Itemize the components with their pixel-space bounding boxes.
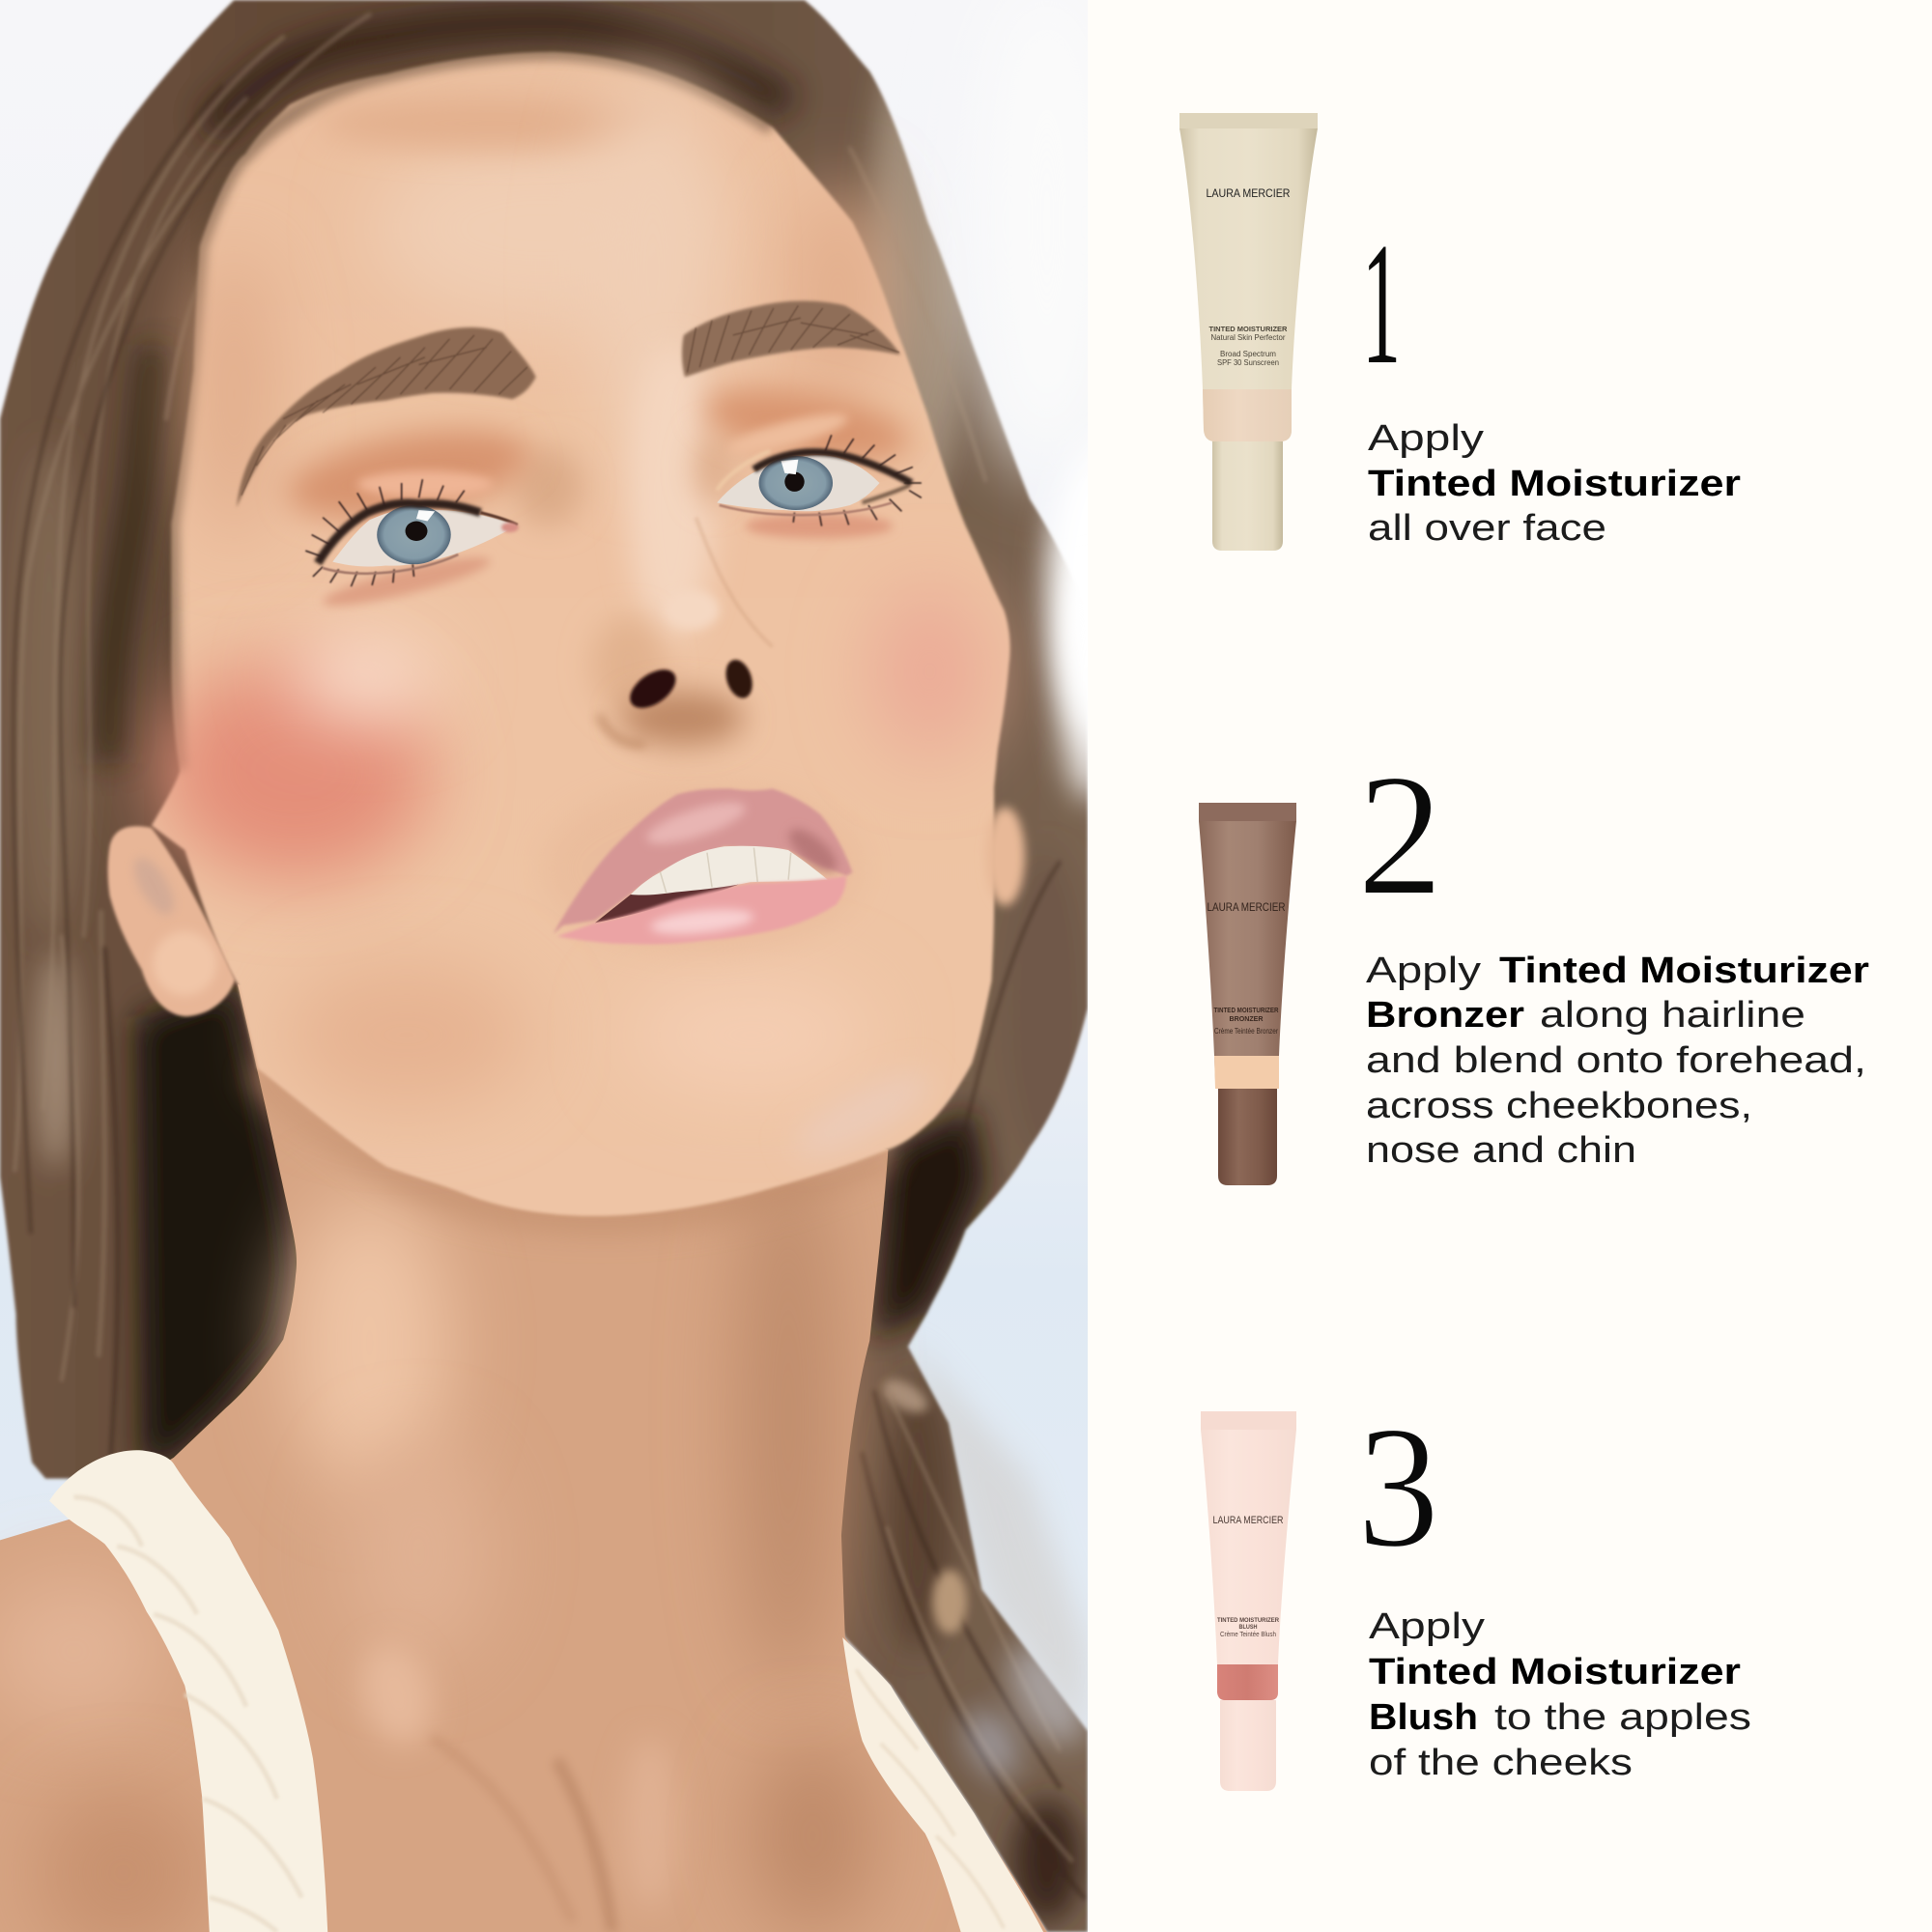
step 3 text: [1369, 1606, 1751, 1783]
lips: [542, 782, 863, 955]
face: [152, 52, 1025, 1216]
product label: SPF 30 Sunscreen: [1217, 358, 1279, 367]
left eyebrow: [237, 327, 536, 508]
nostril right: [722, 656, 757, 701]
upper lip: [554, 788, 852, 934]
dark hair behind jaw, right: [869, 1109, 985, 1341]
step 2 text: Bronzer: [1366, 995, 1524, 1036]
right ear hint: [985, 807, 1025, 906]
product label: [1209, 325, 1288, 367]
dark band at hairline top: [210, 22, 788, 129]
logo: LAURA MERCIER: [1213, 1515, 1284, 1526]
eyeshadow: [281, 376, 916, 614]
numeral 2: 2: [1357, 739, 1443, 932]
mouth interior: [595, 880, 751, 923]
product label: BLUSH: [1238, 1624, 1258, 1631]
step 3 text: to the apples: [1494, 1697, 1751, 1738]
step 2 text: across cheekbones,: [1366, 1086, 1752, 1126]
step 3: [1201, 1391, 1751, 1791]
logo: LAURA MERCIER: [1208, 900, 1286, 914]
product label: Crème Teintée Blush: [1220, 1632, 1276, 1638]
step 1 text: Tinted Moisturizer: [1368, 464, 1741, 504]
rope strap: left: [49, 1450, 327, 1932]
step 1 text: all over face: [1368, 508, 1606, 549]
translucent wisps against sky: [908, 1337, 1088, 1749]
rope strap: right: [842, 1637, 1043, 1932]
step 3 text: Blush: [1369, 1697, 1478, 1738]
tube: Tinted Moisturizer: [1179, 113, 1318, 551]
dark band at hairline left: [110, 345, 154, 764]
tube: Tinted Moisturizer Bronzer: [1199, 803, 1296, 1185]
step 2 text: [1366, 951, 1869, 1171]
tube: Tinted Moisturizer Blush: [1201, 1411, 1296, 1791]
step 3 text: of the cheeks: [1369, 1743, 1633, 1783]
hairline softening: [171, 52, 773, 770]
product label: Crème Teintée Bronzer: [1214, 1027, 1278, 1036]
panel background: [1088, 0, 1932, 1932]
dark hair behind neck, left: [135, 984, 296, 1466]
product label: [1213, 1006, 1279, 1036]
step 2: [1199, 739, 1869, 1185]
step 1 text: Apply: [1368, 418, 1484, 459]
numeral 3: 3: [1357, 1391, 1439, 1584]
step 3 text: Apply: [1369, 1606, 1485, 1647]
nose: [514, 345, 773, 746]
photo: model portrait: [0, 0, 1088, 1932]
product label: Natural Skin Perfector: [1211, 333, 1286, 342]
ear: [108, 826, 236, 1016]
teeth: [631, 846, 828, 895]
hair strands: [14, 14, 1084, 1897]
product label: Broad Spectrum: [1220, 350, 1276, 358]
neck and shoulders: [0, 984, 1047, 1932]
sky background: [0, 0, 1088, 1932]
step 1: 1: [1362, 208, 1401, 401]
face shading: forehead and cheeks: [160, 74, 989, 1171]
product label: TINTED MOISTURIZER: [1217, 1617, 1279, 1624]
product label: TINTED MOISTURIZER: [1213, 1006, 1279, 1014]
step 2 text: along hairline: [1540, 995, 1805, 1036]
left eye: [305, 479, 519, 586]
nostril left: [623, 662, 683, 716]
product label: TINTED MOISTURIZER: [1209, 325, 1288, 333]
step 1: [1179, 113, 1741, 551]
hair mass: [0, 0, 1100, 1932]
white glow at right edge: [980, 0, 1182, 801]
lit hair patches: [932, 1570, 967, 1634]
step 3 text: Tinted Moisturizer: [1369, 1652, 1741, 1692]
step 1 text: [1368, 418, 1741, 549]
step 2 text: and blend onto forehead,: [1366, 1040, 1866, 1081]
step 2 text: Apply: [1366, 951, 1481, 991]
product label: [1217, 1617, 1279, 1638]
step 2 text: Tinted Moisturizer: [1499, 951, 1869, 991]
logo: LAURA MERCIER: [1206, 186, 1291, 200]
lower lip: [556, 876, 846, 945]
product label: BRONZER: [1229, 1014, 1264, 1023]
right eyebrow: [682, 301, 900, 377]
step 2 text: nose and chin: [1366, 1130, 1636, 1171]
right eye: [717, 435, 922, 526]
